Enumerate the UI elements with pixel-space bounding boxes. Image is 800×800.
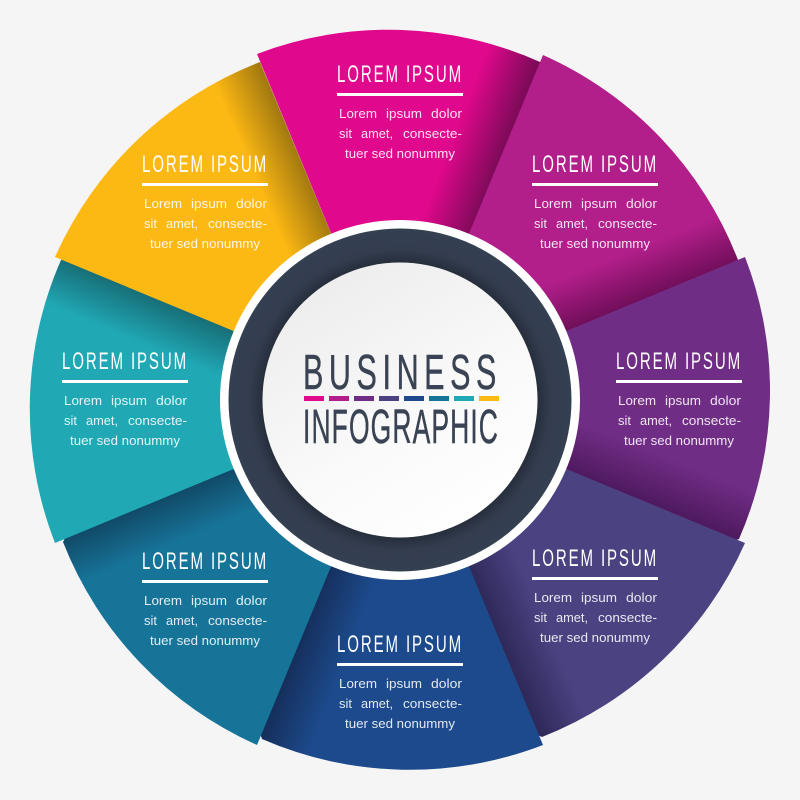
violet-magenta body text: sit xyxy=(534,216,547,231)
teal heading: LOREM IPSUM xyxy=(62,349,188,375)
indigo body text: dolor xyxy=(626,590,658,605)
yellow body text: consecte- xyxy=(208,216,267,231)
panel: purple segment xyxy=(400,257,770,548)
panel: teal segment xyxy=(30,252,400,543)
teal body text: consecte- xyxy=(128,413,187,428)
violet-magenta body text: ipsum xyxy=(581,196,617,211)
magenta body text: consecte- xyxy=(403,126,462,141)
indigo body text: amet, xyxy=(556,610,588,625)
panel: violet-magenta segment xyxy=(400,55,738,400)
yellow body text: tuer sed nonummy xyxy=(150,236,261,251)
violet-magenta wedge xyxy=(400,55,738,400)
indigo body text: ipsum xyxy=(581,590,617,605)
indigo body text: consecte- xyxy=(598,610,657,625)
purple wedge xyxy=(400,257,770,548)
teal-blue body text: Lorem xyxy=(144,593,182,608)
teal body text: ipsum xyxy=(111,393,147,408)
teal body text: dolor xyxy=(156,393,188,408)
white outer ring xyxy=(220,220,580,580)
yellow body text: ipsum xyxy=(191,196,227,211)
panel: indigo segment xyxy=(400,400,745,737)
violet-magenta body text: tuer sed nonummy xyxy=(540,236,651,251)
panel: center hub xyxy=(220,220,580,580)
purple body text: ipsum xyxy=(665,393,701,408)
purple body text: dolor xyxy=(710,393,742,408)
purple body text: amet, xyxy=(640,413,672,428)
purple body text: sit xyxy=(618,413,631,428)
magenta heading: LOREM IPSUM xyxy=(337,62,463,88)
title: infographic: INFOGRAPHIC xyxy=(303,401,499,454)
title: business: BUSINESS xyxy=(303,346,502,400)
yellow body text: dolor xyxy=(236,196,268,211)
violet-magenta body text: amet, xyxy=(556,216,588,231)
teal-blue body text: amet, xyxy=(166,613,198,628)
teal body text: tuer sed nonummy xyxy=(70,433,181,448)
violet-magenta heading: LOREM IPSUM xyxy=(532,152,658,178)
violet-magenta body text: Lorem xyxy=(534,196,572,211)
blue wedge xyxy=(253,400,543,770)
panel: blue segment xyxy=(253,400,543,770)
teal-blue body text: dolor xyxy=(236,593,268,608)
yellow wedge xyxy=(55,62,400,400)
blue body text: Lorem xyxy=(339,676,377,691)
blue body text: ipsum xyxy=(386,676,422,691)
teal wedge xyxy=(30,252,400,543)
indigo body text: Lorem xyxy=(534,590,572,605)
yellow body text: amet, xyxy=(166,216,198,231)
teal body text: sit xyxy=(64,413,77,428)
purple body text: consecte- xyxy=(682,413,741,428)
purple body text: tuer sed nonummy xyxy=(624,433,735,448)
blue body text: amet, xyxy=(361,696,393,711)
magenta body text: sit xyxy=(339,126,352,141)
purple body text: Lorem xyxy=(618,393,656,408)
magenta body text: amet, xyxy=(361,126,393,141)
magenta body text: tuer sed nonummy xyxy=(345,146,456,161)
yellow body text: Lorem xyxy=(144,196,182,211)
dark ring xyxy=(228,228,572,572)
teal-blue body text: tuer sed nonummy xyxy=(150,633,261,648)
colored dashes xyxy=(304,396,499,401)
blue heading: LOREM IPSUM xyxy=(337,632,463,658)
blue body text: consecte- xyxy=(403,696,462,711)
magenta body text: Lorem xyxy=(339,106,377,121)
indigo heading: LOREM IPSUM xyxy=(532,546,658,572)
yellow body text: sit xyxy=(144,216,157,231)
indigo wedge xyxy=(400,400,745,737)
teal-blue heading: LOREM IPSUM xyxy=(142,549,268,575)
blue body text: dolor xyxy=(431,676,463,691)
blue body text: sit xyxy=(339,696,352,711)
indigo body text: tuer sed nonummy xyxy=(540,630,651,645)
white disc xyxy=(262,262,538,538)
panel: teal-blue segment xyxy=(63,400,400,745)
yellow heading: LOREM IPSUM xyxy=(142,152,268,178)
teal body text: Lorem xyxy=(64,393,102,408)
magenta body text: dolor xyxy=(431,106,463,121)
blue body text: tuer sed nonummy xyxy=(345,716,456,731)
teal-blue body text: sit xyxy=(144,613,157,628)
teal body text: amet, xyxy=(86,413,118,428)
magenta body text: ipsum xyxy=(386,106,422,121)
panel: yellow segment xyxy=(55,62,400,400)
violet-magenta body text: consecte- xyxy=(598,216,657,231)
indigo body text: sit xyxy=(534,610,547,625)
violet-magenta body text: dolor xyxy=(626,196,658,211)
teal-blue body text: consecte- xyxy=(208,613,267,628)
teal-blue body text: ipsum xyxy=(191,593,227,608)
panel: magenta segment xyxy=(257,30,549,400)
teal-blue wedge xyxy=(63,400,400,745)
magenta wedge xyxy=(257,30,549,400)
